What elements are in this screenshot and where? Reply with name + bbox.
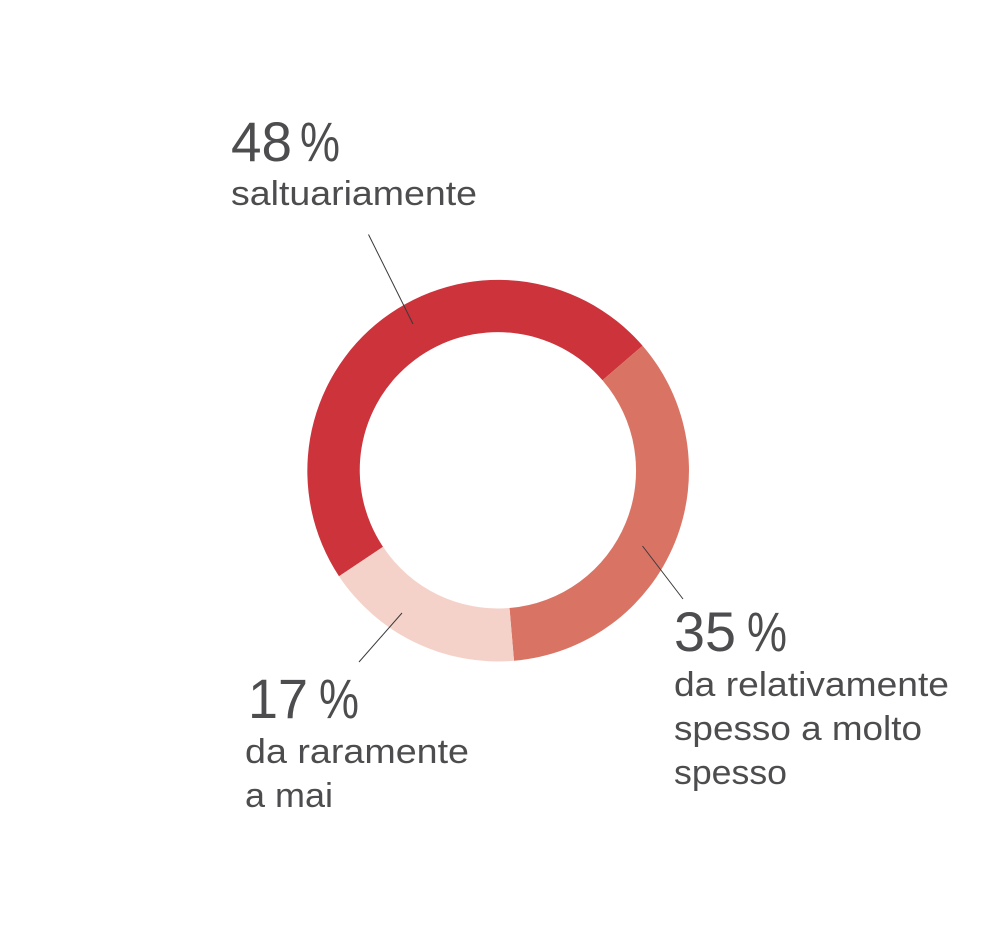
label: 48% saltuariamente	[231, 110, 477, 213]
label: 48% saltuariamente: 48	[231, 110, 292, 173]
label: 17% da raramente a mai: 17	[248, 667, 308, 730]
label: 48% saltuariamente: saltuariamente	[231, 175, 477, 213]
label: 35% da relativamente spesso a molto spesso	[674, 600, 949, 792]
label: 17% da raramente a mai: da raramente	[245, 733, 469, 771]
leader line: 35%	[642, 546, 683, 599]
leader line: 48%	[368, 234, 413, 324]
label: 17% da raramente a mai: %	[319, 667, 359, 730]
label: 17% da raramente a mai	[245, 667, 469, 815]
label: 48% saltuariamente: %	[300, 110, 340, 173]
label: 35% da relativamente spesso a molto spesso: 35	[674, 600, 736, 663]
label: 35% da relativamente spesso a molto spesso: spesso a molto	[674, 710, 922, 748]
segment: 35% da relativamente spesso a molto spesso	[510, 346, 689, 661]
segment: 48% saltuariamente	[307, 280, 643, 576]
segment: 17% da raramente a mai	[339, 547, 514, 661]
donut chart	[307, 280, 689, 661]
label: 35% da relativamente spesso a molto spesso: %	[747, 600, 787, 663]
leader line: 17%	[359, 613, 402, 662]
label: 17% da raramente a mai: a mai	[245, 777, 333, 815]
label: 35% da relativamente spesso a molto spesso: spesso	[674, 754, 787, 792]
label: 35% da relativamente spesso a molto spesso: da relativamente	[674, 666, 949, 704]
